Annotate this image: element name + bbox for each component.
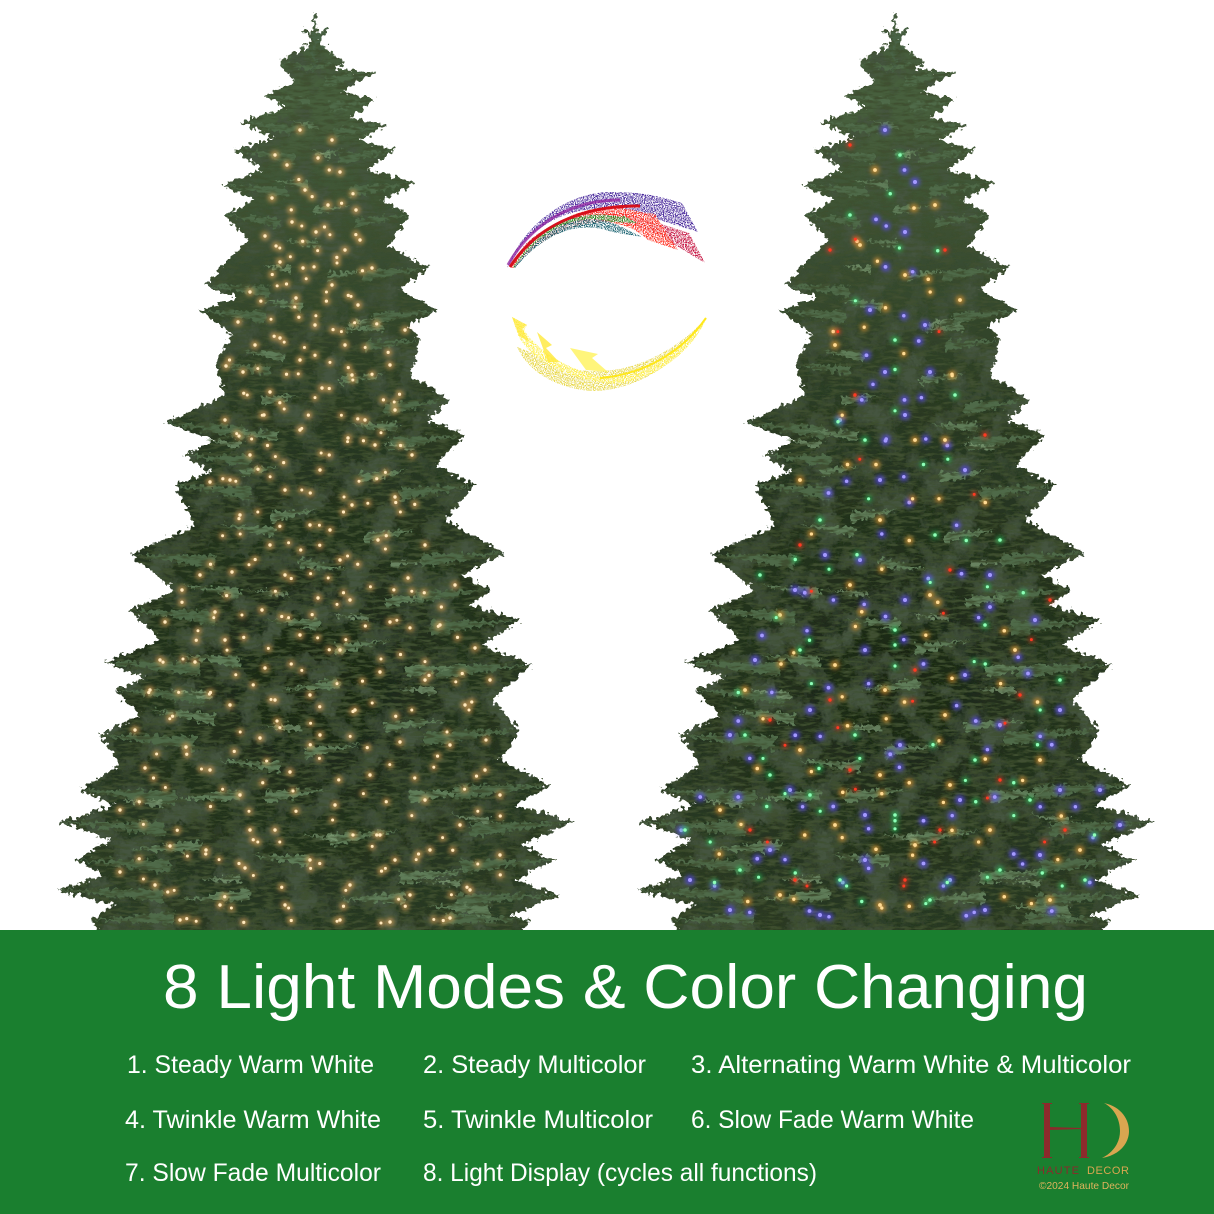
panel: green feature band: [0, 930, 1214, 1214]
mode list: 1. Steady Warm White: [127, 1051, 374, 1079]
mode list: 2. Steady Multicolor: [423, 1051, 646, 1079]
yellow arrow sweep: [512, 317, 707, 391]
green lights: [685, 155, 1094, 904]
rainbow arrow sweep: [507, 192, 705, 268]
blue and purple lights: [681, 130, 1120, 917]
tree: warm white lights: [58, 12, 575, 942]
logo: Haute Decor: [1037, 1103, 1129, 1192]
mode list: 3. Alternating Warm White & Multicolor: [691, 1051, 1131, 1079]
mode list: 5. Twinkle Multicolor: [423, 1106, 653, 1134]
warm white lights with glow: [120, 130, 500, 923]
heading: 8 Light Modes & Color Changing: [163, 953, 1088, 1022]
mode list: 7. Slow Fade Multicolor: [125, 1159, 381, 1187]
tree foliage left: [58, 12, 575, 942]
mode list: 4. Twinkle Warm White: [125, 1106, 381, 1134]
red lights: [750, 145, 1065, 886]
logo: Haute Decor: ©2024 Haute Decor: [1039, 1180, 1129, 1192]
mode list: [125, 1051, 1131, 1187]
color changing arrows icon: [507, 192, 707, 391]
logo: Haute Decor: DECOR: [1087, 1165, 1129, 1177]
mode list: 8. Light Display (cycles all functions): [423, 1159, 817, 1187]
tree: multicolor lights: [638, 12, 1155, 942]
tree foliage right: [638, 12, 1155, 942]
mode list: 6. Slow Fade Warm White: [691, 1106, 974, 1134]
logo: Haute Decor: HAUTE: [1037, 1165, 1079, 1177]
orange warm lights: [719, 170, 1080, 908]
